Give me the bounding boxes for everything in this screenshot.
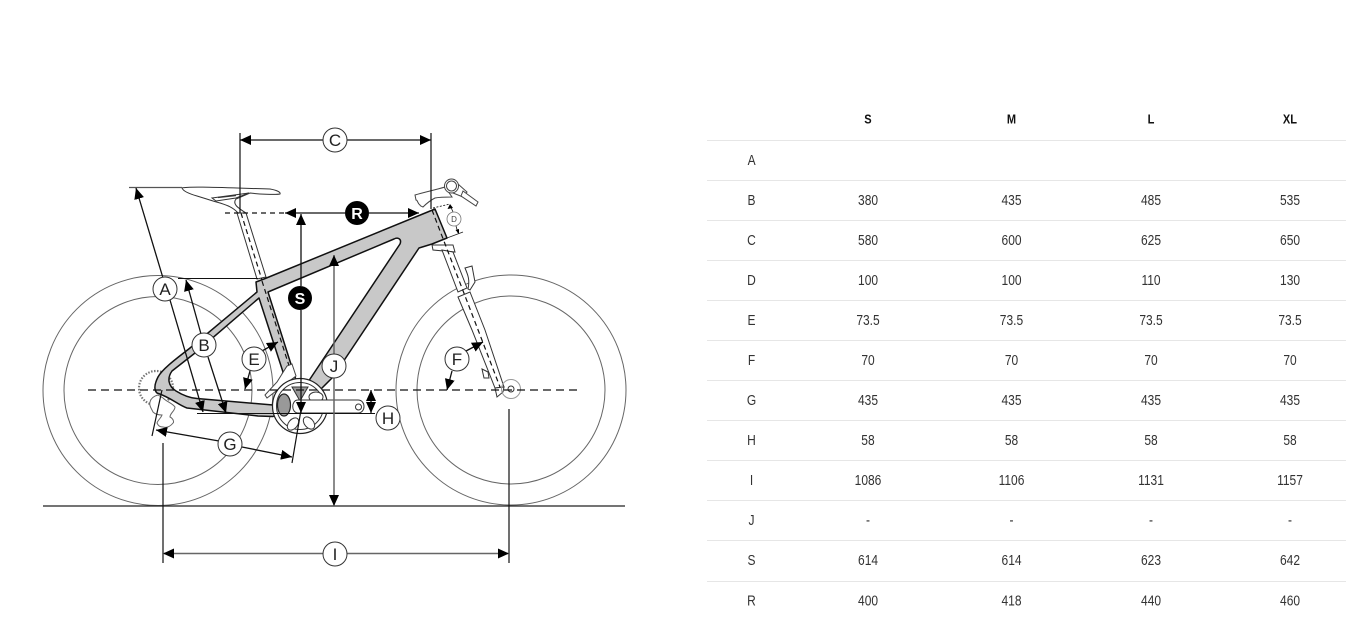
head tube axis	[432, 210, 500, 387]
row J: J	[748, 512, 755, 528]
dimension B: B	[198, 336, 210, 355]
row G: 435	[1141, 392, 1161, 408]
row B: B	[747, 192, 756, 208]
row J: -	[866, 512, 870, 528]
row R: 418	[1001, 592, 1022, 609]
row D: 110	[1141, 272, 1161, 288]
dimension G: G	[223, 435, 237, 454]
row S: 623	[1141, 552, 1161, 568]
row F: F	[748, 352, 755, 368]
dimension C	[240, 128, 431, 213]
row J: -	[1288, 512, 1292, 528]
rear wheel	[43, 276, 273, 506]
row C: 580	[858, 232, 878, 248]
row F: 70	[861, 352, 875, 368]
row I: I	[750, 472, 753, 488]
row G: 435	[1001, 392, 1022, 408]
row B: 535	[1280, 192, 1300, 208]
dimension J: J	[330, 357, 338, 376]
row J	[748, 512, 1292, 528]
dimension R: R	[351, 206, 363, 223]
dimension H: H	[382, 409, 394, 428]
row G	[747, 392, 1300, 408]
dimension S	[288, 214, 312, 413]
row B	[747, 192, 1300, 208]
row J: -	[1149, 512, 1153, 528]
row E	[747, 312, 1302, 328]
row E: 73.5	[1000, 312, 1023, 328]
row R: 440	[1141, 592, 1161, 609]
table header: M	[1007, 112, 1016, 127]
row R: R	[747, 592, 756, 609]
dimension E: E	[248, 350, 260, 369]
row B: 485	[1141, 192, 1161, 208]
row C	[747, 232, 1300, 248]
front wheel	[396, 275, 626, 505]
dimension D: D	[451, 215, 457, 224]
dimension J	[322, 255, 346, 506]
ground line	[43, 505, 625, 507]
row E: 73.5	[1278, 312, 1302, 328]
row F	[748, 352, 1297, 368]
row H: 58	[861, 432, 875, 448]
row H: 58	[1283, 432, 1297, 448]
cassette and rear derailleur	[139, 371, 175, 427]
row I	[750, 472, 1303, 488]
row C: 600	[1002, 232, 1022, 248]
row E: 73.5	[1139, 312, 1163, 328]
row H: 58	[1005, 432, 1018, 448]
dimension A	[129, 188, 203, 412]
seatpost	[237, 213, 266, 280]
row B: 435	[1001, 192, 1022, 208]
row G: 435	[858, 392, 878, 408]
front derailleur	[265, 364, 296, 398]
row G: G	[747, 392, 756, 408]
row S: S	[747, 552, 756, 568]
row H: 58	[1144, 432, 1158, 448]
bike geometry diagram	[43, 128, 626, 566]
dimension F	[445, 342, 483, 390]
dimension D	[433, 204, 463, 238]
row F: 70	[1005, 352, 1019, 368]
row I: 1086	[855, 472, 881, 488]
row C: C	[747, 232, 756, 248]
row R: 400	[858, 592, 878, 609]
row D: 100	[1002, 272, 1022, 288]
handlebar and stem	[415, 179, 478, 207]
chainring	[272, 378, 328, 434]
fork	[432, 245, 520, 398]
seat tube axis	[262, 281, 291, 372]
dimension A: A	[159, 280, 171, 299]
dimension E	[242, 342, 278, 389]
row E: 73.5	[856, 312, 880, 328]
row S: 614	[858, 552, 878, 568]
row C: 650	[1280, 232, 1300, 248]
row D: D	[747, 272, 756, 288]
dimension R	[225, 201, 419, 225]
row F: 70	[1283, 352, 1297, 368]
dimension F: F	[452, 350, 462, 369]
row J: -	[1009, 512, 1014, 528]
row B: 380	[858, 192, 878, 208]
table header: L	[1148, 112, 1154, 127]
row S: 614	[1002, 552, 1022, 568]
row D: 100	[858, 272, 878, 288]
saddle	[182, 187, 280, 213]
dimension I	[163, 409, 509, 566]
dimension C: C	[329, 131, 341, 150]
geometry table	[707, 112, 1346, 609]
dimension G	[152, 390, 301, 463]
row G: 435	[1280, 392, 1300, 408]
dimension B	[178, 278, 375, 414]
row S	[747, 552, 1300, 568]
row E: E	[747, 312, 756, 328]
row R: 460	[1280, 592, 1300, 609]
row R	[747, 592, 1300, 609]
row H	[747, 432, 1297, 448]
row I: 1106	[999, 472, 1024, 488]
dimension H	[371, 390, 400, 430]
dimension I: I	[333, 545, 337, 564]
row I: 1157	[1277, 472, 1303, 488]
row D: 130	[1280, 272, 1300, 288]
table header: XL	[1283, 112, 1297, 127]
axle dashed line	[88, 389, 582, 391]
crank arm	[293, 400, 364, 413]
row S: 642	[1280, 552, 1300, 568]
table header	[864, 112, 1297, 127]
row C: 625	[1141, 232, 1161, 248]
dimension S: S	[295, 291, 306, 308]
frame	[155, 209, 447, 416]
row A: A	[748, 152, 756, 168]
row I: 1131	[1138, 472, 1164, 488]
table header: S	[864, 112, 872, 127]
row F: 70	[1144, 352, 1158, 368]
row D	[747, 272, 1300, 288]
table rules	[707, 140, 1346, 582]
row H: H	[747, 432, 756, 448]
